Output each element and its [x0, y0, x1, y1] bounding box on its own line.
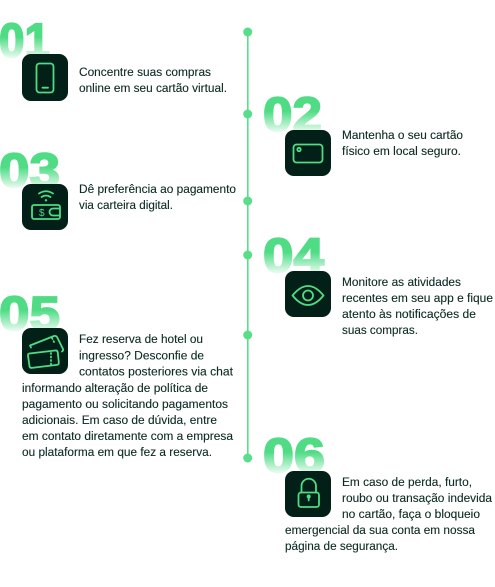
text 01: online em seu cartão virtual.: [79, 81, 227, 95]
icon: eye: [285, 271, 331, 317]
text 06: [285, 475, 492, 553]
text 06: emergencial da sua conta em nossa: [285, 523, 475, 537]
number 02: 02: [263, 89, 322, 142]
step 01: [0, 15, 227, 101]
text 06: roubo ou transação indevida: [342, 491, 492, 505]
text 05: informando alteração de política de: [22, 381, 208, 395]
text 06: Em caso de perda, furto,: [342, 475, 472, 489]
step 05: [0, 288, 234, 459]
text 04: suas compras.: [342, 323, 418, 337]
step 06: [263, 430, 492, 553]
text 03: [79, 182, 236, 212]
step 03: [0, 145, 236, 230]
text 04: [342, 275, 493, 337]
icon: tickets: [22, 328, 68, 374]
text 01: [79, 65, 227, 95]
text 05: pagamento ou solicitando pagamentos: [22, 397, 228, 411]
text 02: [342, 128, 463, 158]
text 05: adicionais. Em caso de dúvida, entre: [22, 413, 217, 427]
number 01: 01: [0, 15, 50, 68]
step 04: [263, 230, 493, 337]
text 05: ingresso? Desconfie de: [79, 348, 204, 362]
timeline: [243, 28, 252, 462]
number 06: 06: [263, 430, 325, 483]
number 04: 04: [263, 230, 324, 283]
text 06: página de segurança.: [285, 539, 398, 553]
icon: padlock: [285, 471, 331, 517]
text 01: Concentre suas compras: [79, 65, 211, 79]
text 04: recentes em seu app e fique: [342, 291, 493, 305]
number 05: 05: [0, 288, 60, 341]
text 03: Dê preferência ao pagamento: [79, 182, 236, 196]
text 05: [22, 332, 234, 459]
text 05: Fez reserva de hotel ou: [79, 332, 203, 346]
icon: phone: [22, 54, 68, 101]
text 02: físico em local seguro.: [342, 144, 461, 158]
step 02: [263, 89, 463, 176]
text 04: atento às notificações de: [342, 307, 476, 321]
text 04: Monitore as atividades: [342, 275, 461, 289]
text 05: contatos posteriores via chat: [79, 364, 234, 378]
icon: digital wallet: [22, 184, 68, 230]
icon: card: [285, 130, 331, 176]
text 06: no cartão, faça o bloqueio: [342, 507, 480, 521]
text 03: via carteira digital.: [79, 198, 173, 212]
text 05: em contato diretamente com a empresa: [22, 429, 233, 443]
number 03: 03: [0, 145, 60, 198]
text 02: Mantenha o seu cartão: [342, 128, 463, 142]
text 05: ou plataforma em que fez a reserva.: [22, 445, 212, 459]
icon: digital wallet: $: [39, 208, 45, 219]
